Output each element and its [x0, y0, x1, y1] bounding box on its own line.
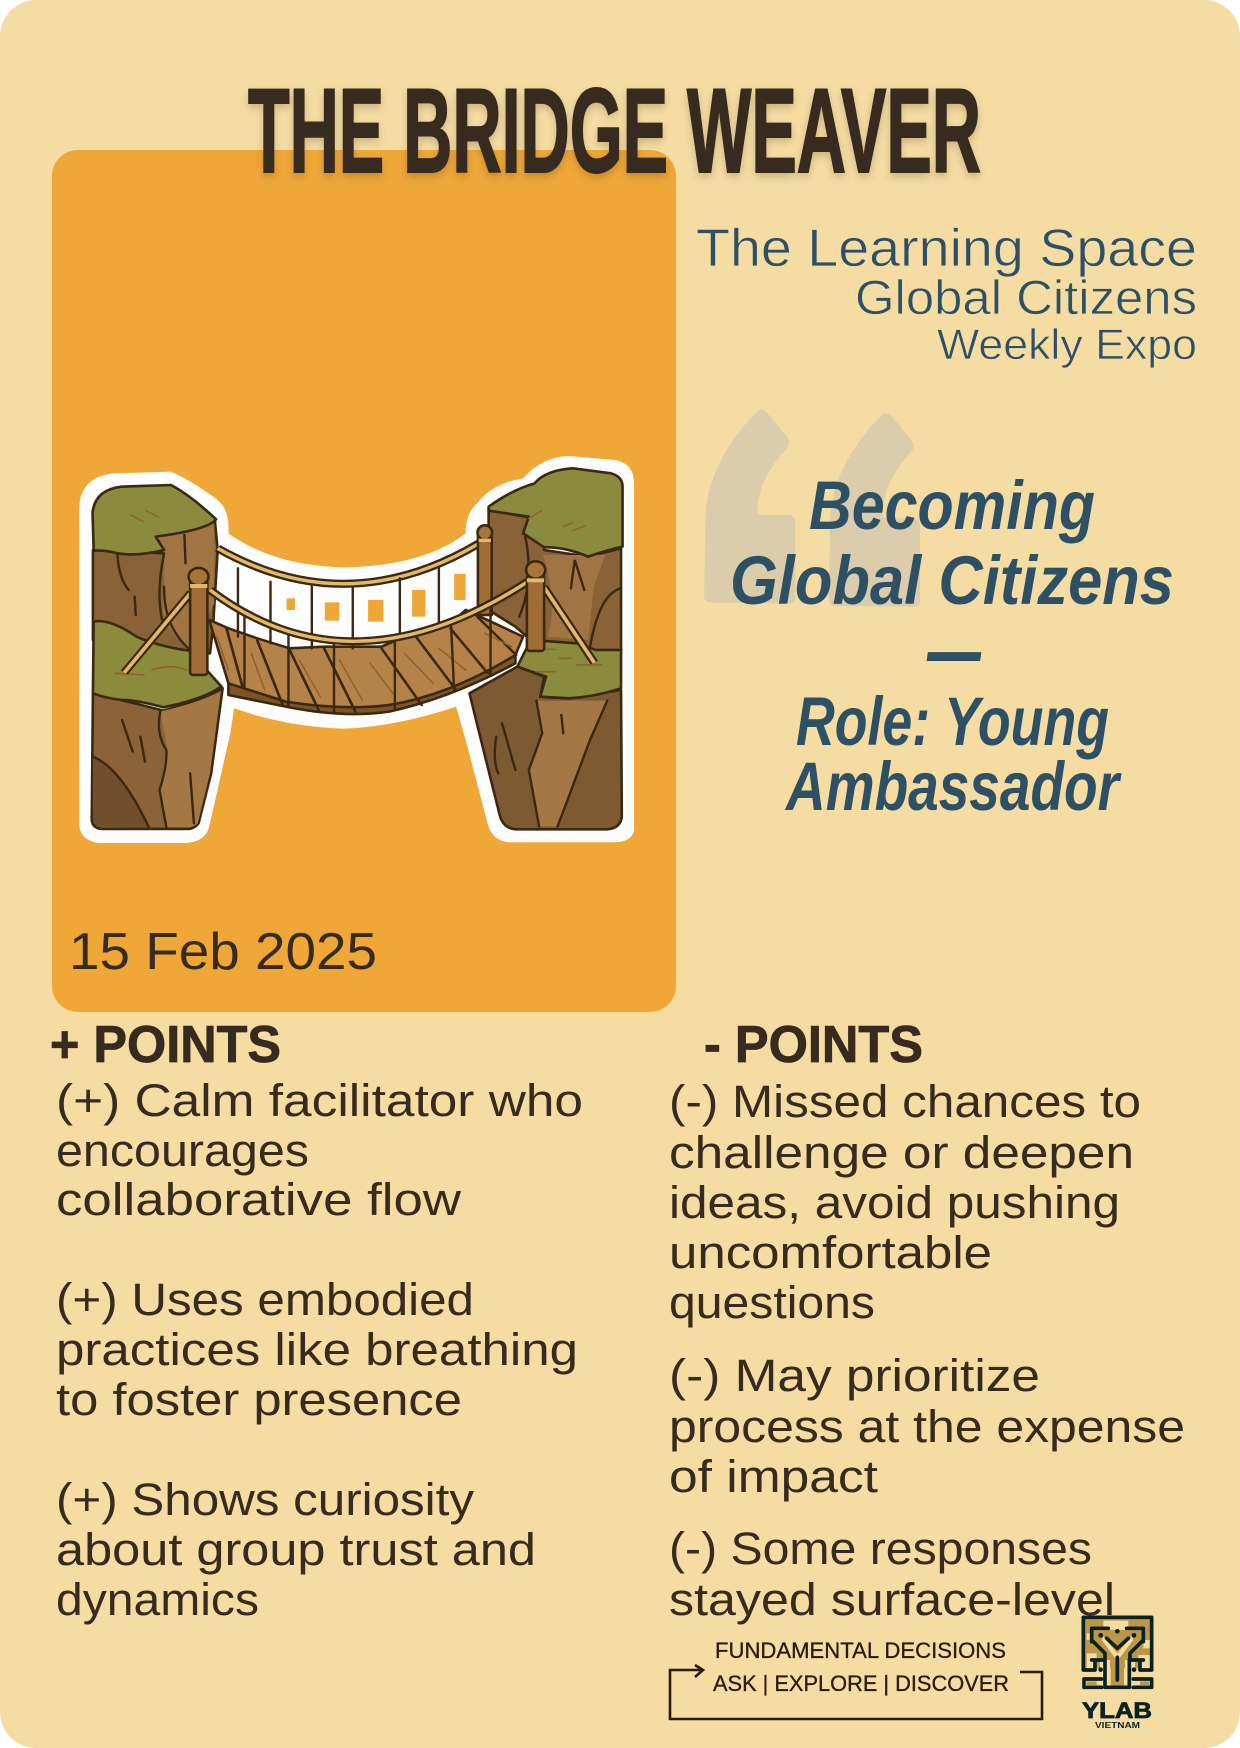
positive point 2: practices like breathing [56, 1324, 578, 1375]
left cliff lower [92, 621, 223, 829]
negative point 2 [669, 1350, 1185, 1502]
arrow: loop frame [670, 1665, 1042, 1719]
quote line 1: Becoming [809, 467, 1095, 544]
left cliff upper [93, 485, 218, 653]
date: 15 Feb 2025 [69, 923, 377, 981]
positive point 3: about group trust and [56, 1524, 536, 1575]
subtitle: event: Weekly Expo [937, 321, 1197, 369]
panel: positive points [50, 1016, 583, 1625]
positive point 1: collaborative flow [56, 1174, 462, 1225]
negative point 1: (-) Missed chances to [669, 1076, 1141, 1127]
right cliff lower [469, 640, 622, 829]
positive point 2 [56, 1274, 578, 1425]
logo wordmark: YLAB [1082, 1698, 1152, 1723]
positive point 2: to foster presence [56, 1374, 462, 1425]
dash: — [927, 613, 981, 690]
subtitle: programme: The Learning Space [696, 219, 1197, 278]
positive point 3: (+) Shows curiosity [56, 1474, 475, 1525]
positive point 3 [56, 1474, 536, 1625]
quote line 2: Global Citizens [730, 542, 1174, 619]
panel: orange illustration card [52, 150, 676, 1012]
icon: quotation mark [704, 410, 920, 607]
right back post [478, 525, 492, 615]
front rope [210, 582, 528, 641]
heading: - points: - POINTS [704, 1016, 923, 1074]
subtitle: theme: Global Citizens [855, 272, 1197, 325]
heading: + points: + POINTS [50, 1016, 281, 1074]
role line 2: Ambassador [784, 748, 1122, 825]
illustration: rope bridge sticker [79, 456, 634, 843]
negative point 1: questions [669, 1277, 875, 1328]
logo mark [1083, 1617, 1152, 1688]
right cliff upper [489, 468, 623, 653]
guy ropes [124, 587, 594, 673]
logo sub-wordmark: VIETNAM [1095, 1721, 1140, 1730]
tagline line 1: FUNDAMENTAL DECISIONS [715, 1638, 1006, 1663]
negative point 1: challenge or deepen [669, 1127, 1134, 1178]
subtitle block [696, 219, 1197, 369]
front hangers [244, 610, 491, 713]
negative point 1 [669, 1076, 1141, 1328]
negative point 1: uncomfortable [669, 1227, 992, 1278]
back hangers [238, 567, 439, 648]
role line 1: Role: Young [796, 683, 1109, 760]
positive point 3: dynamics [56, 1574, 259, 1625]
negative point 1: ideas, avoid pushing [669, 1177, 1120, 1228]
tagline line 2: ASK | EXPLORE | DISCOVER [713, 1671, 1009, 1696]
positive point 2: (+) Uses embodied [56, 1274, 474, 1325]
negative point 3: stayed surface-level [669, 1574, 1115, 1625]
negative point 2: (-) May prioritize [669, 1350, 1040, 1401]
positive point 1: encourages [56, 1125, 309, 1176]
window gaps in rail [287, 574, 466, 622]
positive point 1: (+) Calm facilitator who [56, 1075, 583, 1126]
negative point 3 [669, 1523, 1115, 1625]
negative point 2: of impact [669, 1451, 879, 1502]
negative point 3: (-) Some responses [669, 1523, 1092, 1574]
sticker white outline [79, 456, 634, 843]
right front post [526, 561, 545, 651]
left front post [189, 568, 208, 675]
quote text block [730, 467, 1174, 825]
bridge deck [209, 610, 523, 714]
negative point 2: process at the expense [669, 1401, 1185, 1452]
tagline with loop arrow [670, 1638, 1042, 1719]
positive point 1 [56, 1075, 583, 1225]
logo: YLAB Vietnam [1082, 1617, 1152, 1730]
panel: negative points [669, 1016, 1185, 1625]
back rope [218, 543, 479, 584]
